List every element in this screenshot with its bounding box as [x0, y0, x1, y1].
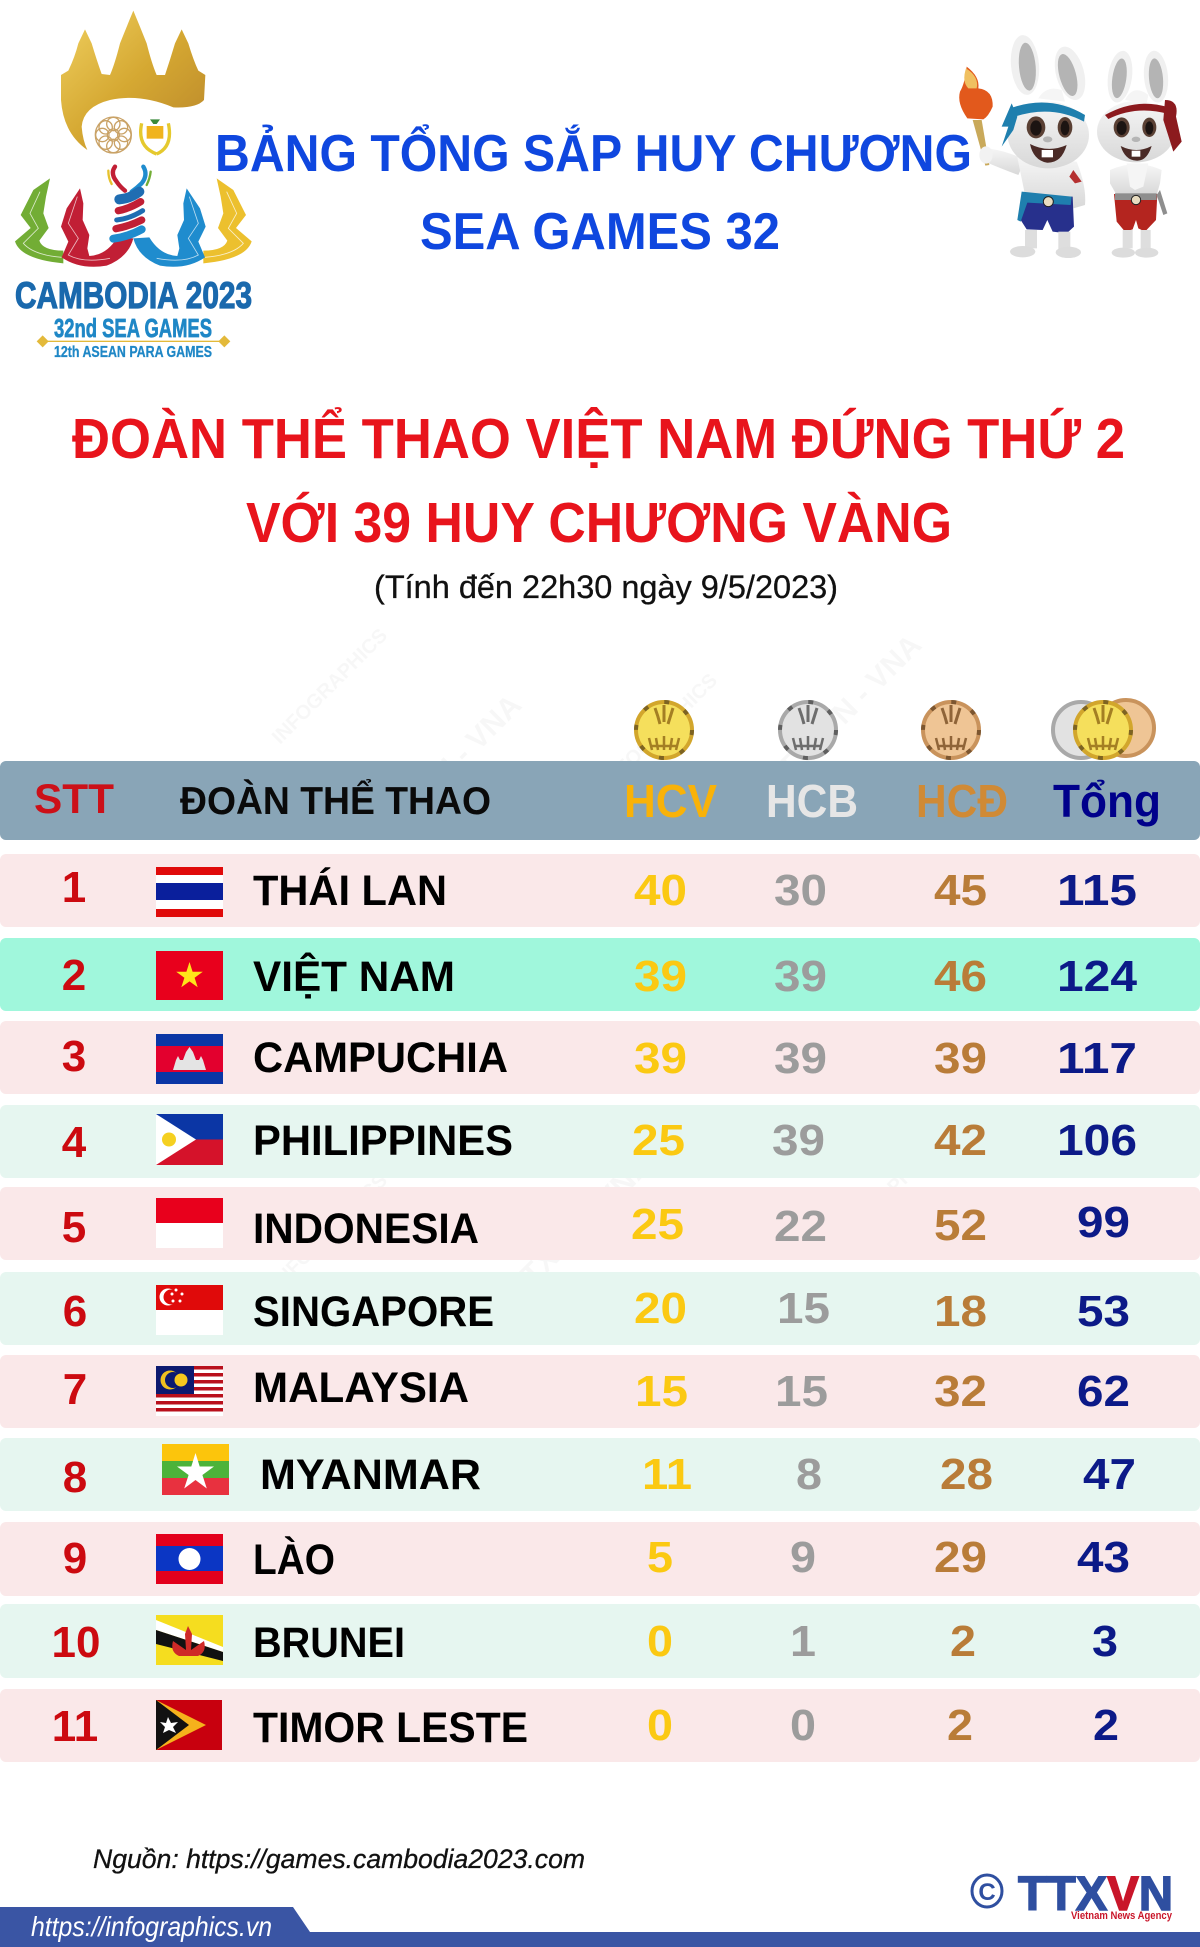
- title: blue heading: [215, 124, 972, 261]
- row 11: Timor Leste: 2: [1093, 1701, 1119, 1750]
- row 3: Campuchia: 39: [774, 1034, 827, 1083]
- row 9: Lào: 5: [647, 1533, 673, 1582]
- column: total: Tổng: [1053, 775, 1161, 827]
- rabbit mascot, blue: [979, 34, 1091, 258]
- column: delegation: ĐOÀN THỂ THAO: [180, 778, 491, 823]
- row 1: Thái Lan: 45: [934, 866, 987, 915]
- row 5: Indonesia: 25: [631, 1200, 684, 1249]
- row 8: Myanmar: 47: [1083, 1450, 1136, 1499]
- row 7: Malaysia: [0, 1355, 1200, 1428]
- row 9: Lào: 9: [63, 1534, 87, 1583]
- row 4: Philippines: 25: [632, 1116, 685, 1165]
- agency logo: TTXVN: [972, 1868, 1173, 1922]
- row 8: Myanmar: MYANMAR: [260, 1451, 481, 1499]
- row 11: Timor Leste: 2: [947, 1701, 973, 1750]
- row 2: Việt Nam: 46: [934, 952, 987, 1001]
- naga knot: [108, 167, 151, 239]
- watermarks: [268, 625, 942, 1305]
- flag: Thailand: [156, 867, 223, 917]
- row 9: Lào: 29: [934, 1533, 987, 1582]
- watermarks: INFOGRAPHICS: [268, 625, 392, 749]
- row 2: Việt Nam: 39: [774, 952, 827, 1001]
- watermarks: TTXVN - VNA: [772, 628, 928, 785]
- row 5: Indonesia: INDONESIA: [253, 1205, 479, 1253]
- logo: Cambodia 2023 SEA Games: [15, 11, 252, 361]
- row 2: Việt Nam: 124: [1057, 952, 1138, 1001]
- logo divider with diamonds: [37, 335, 230, 347]
- row 2: Việt Nam: 39: [634, 952, 687, 1001]
- watermarks: TTXVN - VNA: [502, 1148, 658, 1305]
- row 8: Myanmar: [0, 1438, 1200, 1511]
- medals: all three stacked: [1053, 700, 1154, 758]
- watermarks: INFOGRAPHICS: [268, 1170, 392, 1294]
- naga: blue: [133, 188, 206, 267]
- row 4: Philippines: 4: [62, 1118, 87, 1167]
- footer url: https://infographics.vn: [31, 1911, 272, 1942]
- row 6: Singapore: 20: [634, 1284, 687, 1333]
- row 7: Malaysia: 7: [63, 1365, 87, 1414]
- subtitle: red headline: ĐOÀN THỂ THAO VIỆT NAM ĐỨNG THỨ 2: [72, 406, 1125, 471]
- row 7: Malaysia: MALAYSIA: [253, 1364, 469, 1412]
- footer band: [0, 1907, 1200, 1947]
- row 10: Brunei: 2: [950, 1617, 976, 1666]
- subtitle: red headline: [72, 406, 1125, 555]
- row 1: Thái Lan: [0, 854, 1200, 927]
- row 3: Campuchia: 39: [934, 1034, 987, 1083]
- row 9: Lào: 43: [1077, 1533, 1130, 1582]
- date note: (Tính đến 22h30 ngày 9/5/2023): [374, 569, 838, 605]
- row 4: Philippines: 106: [1057, 1116, 1137, 1165]
- flag: Indonesia: [156, 1198, 223, 1248]
- flag: Cambodia: [156, 1034, 223, 1084]
- copyright mark: [972, 1875, 1002, 1907]
- row 6: Singapore: SINGAPORE: [253, 1288, 494, 1336]
- row 3: Campuchia: CAMPUCHIA: [253, 1034, 508, 1082]
- rabbit mascot, red: [1097, 49, 1182, 258]
- naga: yellow: [203, 178, 252, 263]
- row 6: Singapore: 18: [934, 1287, 987, 1336]
- agency tagline: Vietnam News Agency: [1071, 1910, 1173, 1922]
- logo subtitle: SEA Games: 32nd SEA GAMES: [54, 313, 212, 343]
- row 9: Lào: LÀO: [253, 1536, 335, 1584]
- row 3: Campuchia: 117: [1057, 1034, 1137, 1083]
- row 10: Brunei: [0, 1604, 1200, 1678]
- medal: silver: [780, 702, 836, 758]
- watermarks: INFOGRAPHICS: [598, 670, 722, 794]
- row 1: Thái Lan: 115: [1057, 866, 1137, 915]
- row 11: Timor Leste: TIMOR LESTE: [253, 1704, 528, 1752]
- row 7: Malaysia: 15: [775, 1367, 828, 1416]
- column: rank: STT: [34, 775, 114, 822]
- column: gold: HCV: [624, 775, 717, 827]
- torch: [959, 67, 993, 166]
- row 6: Singapore: 6: [63, 1287, 87, 1336]
- logo wordmark: CAMBODIA 2023: [15, 275, 252, 316]
- row 11: Timor Leste: 0: [790, 1701, 816, 1750]
- flag: Brunei: [156, 1615, 223, 1665]
- row 1: Thái Lan: 1: [62, 863, 86, 912]
- row 10: Brunei: 0: [647, 1617, 673, 1666]
- row 7: Malaysia: 62: [1077, 1367, 1130, 1416]
- table header: [0, 761, 1200, 840]
- icon: mascots: [959, 34, 1182, 258]
- column: silver: HCB: [766, 775, 858, 827]
- row 2: Việt Nam: 2: [62, 951, 86, 1000]
- logo crown: [61, 11, 205, 150]
- row 10: Brunei: 3: [1092, 1617, 1118, 1666]
- source note: Nguồn: https://games.cambodia2023.com: [93, 1844, 585, 1874]
- title: blue heading: BẢNG TỔNG SẮP HUY CHƯƠNG: [215, 124, 972, 183]
- row 5: Indonesia: [0, 1187, 1200, 1260]
- ASEAN flower emblem: [95, 117, 131, 153]
- row 10: Brunei: 1: [790, 1617, 816, 1666]
- row 4: Philippines: 42: [934, 1116, 987, 1165]
- flag: Vietnam: [156, 951, 223, 1000]
- naga: green: [15, 178, 63, 263]
- row 9: Lào: [0, 1522, 1200, 1596]
- flag: Timor Leste: [156, 1700, 222, 1750]
- title: blue heading: SEA GAMES 32: [420, 203, 780, 261]
- row 5: Indonesia: 5: [62, 1203, 86, 1252]
- row 8: Myanmar: 8: [796, 1450, 822, 1499]
- logo subtitle: Para Games: 12th ASEAN PARA GAMES: [54, 344, 212, 361]
- copyright mark: C: [978, 1879, 996, 1906]
- row 6: Singapore: 15: [777, 1284, 830, 1333]
- row 8: Myanmar: 11: [642, 1450, 692, 1499]
- row 1: Thái Lan: THÁI LAN: [253, 867, 447, 915]
- row 8: Myanmar: 28: [940, 1450, 993, 1499]
- row 3: Campuchia: 39: [634, 1034, 687, 1083]
- row 3: Campuchia: 3: [62, 1032, 86, 1081]
- flag: Malaysia: [156, 1366, 223, 1416]
- watermarks: TTXVN - VNA: [372, 688, 528, 845]
- row 7: Malaysia: 32: [934, 1367, 987, 1416]
- row 10: Brunei: BRUNEI: [253, 1619, 405, 1667]
- row 2: Việt Nam: [0, 938, 1200, 1011]
- row 10: Brunei: 10: [52, 1618, 100, 1667]
- row 1: Thái Lan: 30: [774, 866, 827, 915]
- medal: gold: [636, 702, 692, 758]
- medal: bronze: [923, 702, 979, 758]
- flag: Myanmar: [162, 1444, 229, 1495]
- row 11: Timor Leste: 11: [52, 1702, 98, 1751]
- row 5: Indonesia: 52: [934, 1201, 987, 1250]
- row 7: Malaysia: 15: [635, 1367, 688, 1416]
- subtitle: red headline: VỚI 39 HUY CHƯƠNG VÀNG: [246, 491, 952, 555]
- row 11: Timor Leste: 0: [647, 1701, 673, 1750]
- row 11: Timor Leste: [0, 1689, 1200, 1762]
- wordmark: TTXVN: [1018, 1868, 1173, 1921]
- row 3: Campuchia: [0, 1021, 1200, 1094]
- row 5: Indonesia: 22: [774, 1202, 827, 1251]
- row 2: Việt Nam: VIỆT NAM: [253, 952, 455, 1001]
- flag: Philippines: [156, 1114, 223, 1165]
- watermarks: INFOGRAPHICS: [818, 1140, 942, 1264]
- row 4: Philippines: 39: [772, 1116, 825, 1165]
- column: bronze: HCĐ: [916, 775, 1008, 827]
- row 6: Singapore: 53: [1077, 1287, 1130, 1336]
- ASEAN wreath emblem: [141, 119, 169, 154]
- row 5: Indonesia: 99: [1077, 1198, 1130, 1247]
- row 4: Philippines: PHILIPPINES: [253, 1117, 513, 1165]
- row 9: Lào: 9: [790, 1533, 816, 1582]
- flag: Singapore: [156, 1285, 223, 1335]
- row 8: Myanmar: 8: [63, 1453, 87, 1502]
- row 6: Singapore: [0, 1272, 1200, 1345]
- row 4: Philippines: [0, 1105, 1200, 1178]
- flag: Laos: [156, 1534, 223, 1584]
- naga: red: [61, 188, 133, 267]
- row 1: Thái Lan: 40: [634, 866, 687, 915]
